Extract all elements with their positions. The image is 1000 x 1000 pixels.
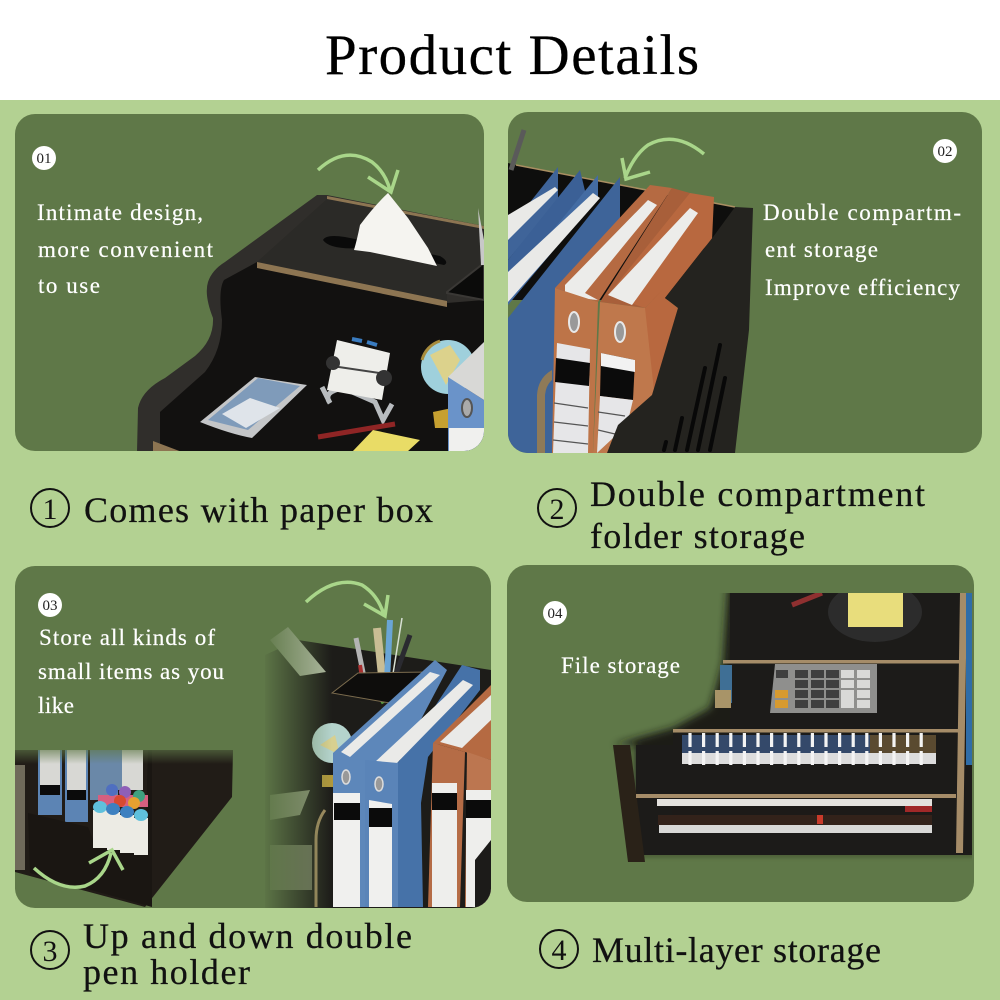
caption 2: Double compartment: [590, 474, 925, 514]
pen: [318, 424, 395, 437]
panel 3 text: like: [38, 693, 74, 718]
calculator: [770, 664, 877, 713]
badge 03: [38, 593, 62, 617]
panel 2 text: ent storage: [765, 237, 878, 262]
panel 2 text: Double compartm-: [763, 200, 961, 225]
badge 04: [543, 601, 567, 625]
panel 3 text: [38, 625, 224, 718]
caption 2: 2: [550, 493, 564, 526]
pens in cup: [478, 208, 484, 265]
badge 02: 02: [938, 144, 952, 160]
badge 02: [933, 139, 957, 163]
fade top of holder: [15, 750, 233, 762]
badge 03: 03: [42, 598, 58, 614]
pen cup: [332, 672, 430, 703]
panel 1 text: Intimate design,: [37, 200, 203, 225]
pen behind: [511, 130, 524, 170]
panel: pen holder: [15, 566, 491, 908]
organizer body: [613, 582, 980, 855]
badge 01: [32, 146, 56, 170]
caption 3: [31, 916, 412, 992]
grommets: [569, 312, 625, 342]
fade over rear unit: [265, 627, 328, 908]
tissue: [354, 193, 437, 266]
arrow 2: [622, 139, 704, 179]
orange folders: [552, 185, 714, 453]
caption 2: [538, 474, 925, 556]
pens: [356, 618, 410, 703]
panel 3 text: small items as you: [38, 659, 224, 684]
tissue slot: [323, 236, 446, 265]
panel 3 text: Store all kinds of: [39, 625, 215, 650]
globe: [312, 723, 352, 787]
panel 2 text: Improve efficiency: [765, 275, 960, 300]
caption 3: Up and down double: [83, 916, 412, 956]
pen on top: [792, 593, 822, 605]
left leg: [613, 745, 645, 862]
books and tan edge: [270, 790, 325, 907]
tissue ghost: [270, 627, 326, 676]
panel 1 text: [37, 200, 214, 298]
badge 04: 04: [548, 606, 563, 622]
panel 2 text: [763, 200, 961, 300]
organizer body: [137, 195, 484, 452]
arrow 1: [318, 155, 398, 192]
spine labels: [553, 343, 635, 453]
blue folders: [508, 167, 620, 453]
panel: paper box: [15, 114, 484, 452]
lower-left holder: [15, 750, 233, 907]
title: Product Details: [325, 24, 699, 87]
orange folders: [428, 685, 491, 907]
spiral notebooks: [682, 733, 936, 768]
caption 4: Multi-layer storage: [592, 930, 881, 970]
dark rear frame: [508, 163, 735, 300]
shelves: [636, 593, 967, 853]
wall slots: [664, 345, 725, 450]
coaster and sticky note: [828, 593, 922, 642]
sticky note: [352, 430, 420, 452]
tan slot edge: [537, 370, 552, 453]
stacked papers: [657, 799, 932, 833]
rear unit: [265, 640, 491, 908]
folder: [448, 342, 484, 452]
markers: [93, 784, 148, 855]
faded book: [715, 665, 732, 708]
caption 2: folder storage: [590, 516, 805, 556]
phone: [200, 377, 307, 438]
caption 3: pen holder: [83, 952, 250, 992]
pen cup: [447, 263, 484, 300]
green arrow lower-left: [34, 850, 123, 887]
blue strip: [966, 593, 972, 765]
caption 3: 3: [42, 935, 58, 968]
right wall of holder: [607, 207, 753, 453]
caption 1: Comes with paper box: [84, 490, 433, 530]
arrow 3: [306, 582, 388, 616]
caption 1: 1: [42, 493, 58, 526]
panel 1 text: more convenient: [38, 237, 214, 262]
globe: [421, 340, 475, 428]
blue folders: [333, 660, 480, 907]
panel: folders: [508, 112, 982, 453]
header band: [0, 0, 1000, 100]
caption 4: 4: [552, 934, 566, 967]
panel 1 text: to use: [38, 273, 100, 298]
badge 01: 01: [36, 151, 52, 167]
panel: file storage: [507, 565, 980, 902]
panel 4 text: File storage: [561, 653, 680, 678]
rolodex: [322, 339, 392, 420]
